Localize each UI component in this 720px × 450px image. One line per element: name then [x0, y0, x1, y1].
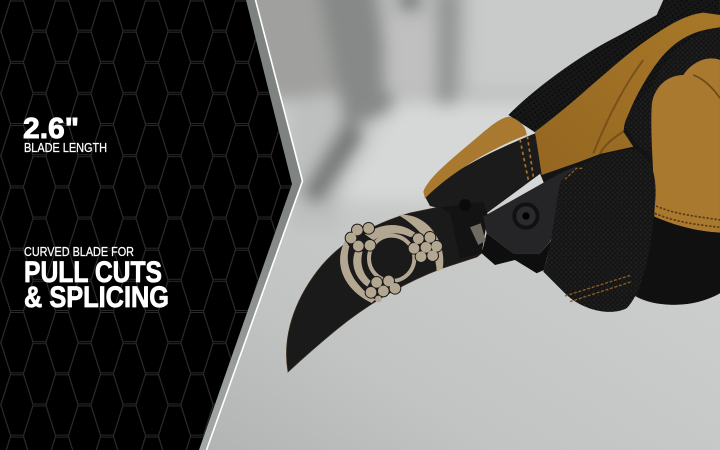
white border line [206, 0, 302, 450]
glove: palm stitching [655, 206, 720, 227]
glove and knife handle [423, 0, 720, 312]
left panel edge band [190, 0, 303, 450]
knife handle [483, 166, 577, 253]
text: curved blade for pull cuts and splicing [24, 245, 169, 314]
knife blade [286, 202, 483, 372]
blade heel and pivot area [440, 202, 488, 258]
glove: thumb seam shadow [693, 75, 720, 98]
blade pivot [459, 199, 471, 211]
text: curved blade for pull cuts and splicing: CURVED BLADE FOR [24, 245, 134, 259]
glove: tan panel creases [593, 60, 643, 154]
glove: tan thumb palm [651, 58, 720, 233]
glove: tan finger panel [535, 13, 720, 175]
glove: black leather finger [425, 133, 541, 213]
glove: dark base behind handle [535, 133, 653, 207]
glove: tan fingertip [423, 117, 527, 198]
black panel with hexagon pattern [0, 0, 292, 450]
glove: pebbled thumb pad [543, 149, 656, 312]
knife handle lower tail [482, 233, 552, 273]
glove: black mesh back of hand [508, 0, 720, 305]
stat: 2.6 inch blade length: 2.6" [23, 113, 79, 145]
engraved blade emblem [340, 215, 443, 303]
glove: thumb pad stitching [565, 168, 632, 302]
text: curved blade for pull cuts and splicing: PULL CUTS [24, 256, 162, 289]
glove: finger stitching [520, 136, 533, 180]
handle screw [512, 202, 540, 230]
knife spine marking [470, 223, 486, 245]
stat: 2.6 inch blade length [23, 113, 107, 155]
stat: 2.6 inch blade length: BLADE LENGTH [24, 141, 107, 155]
text: curved blade for pull cuts and splicing: & SPLICING [24, 281, 169, 314]
glove: dark ventilated palm [624, 27, 720, 157]
glove: black cuff under palm [637, 217, 720, 305]
